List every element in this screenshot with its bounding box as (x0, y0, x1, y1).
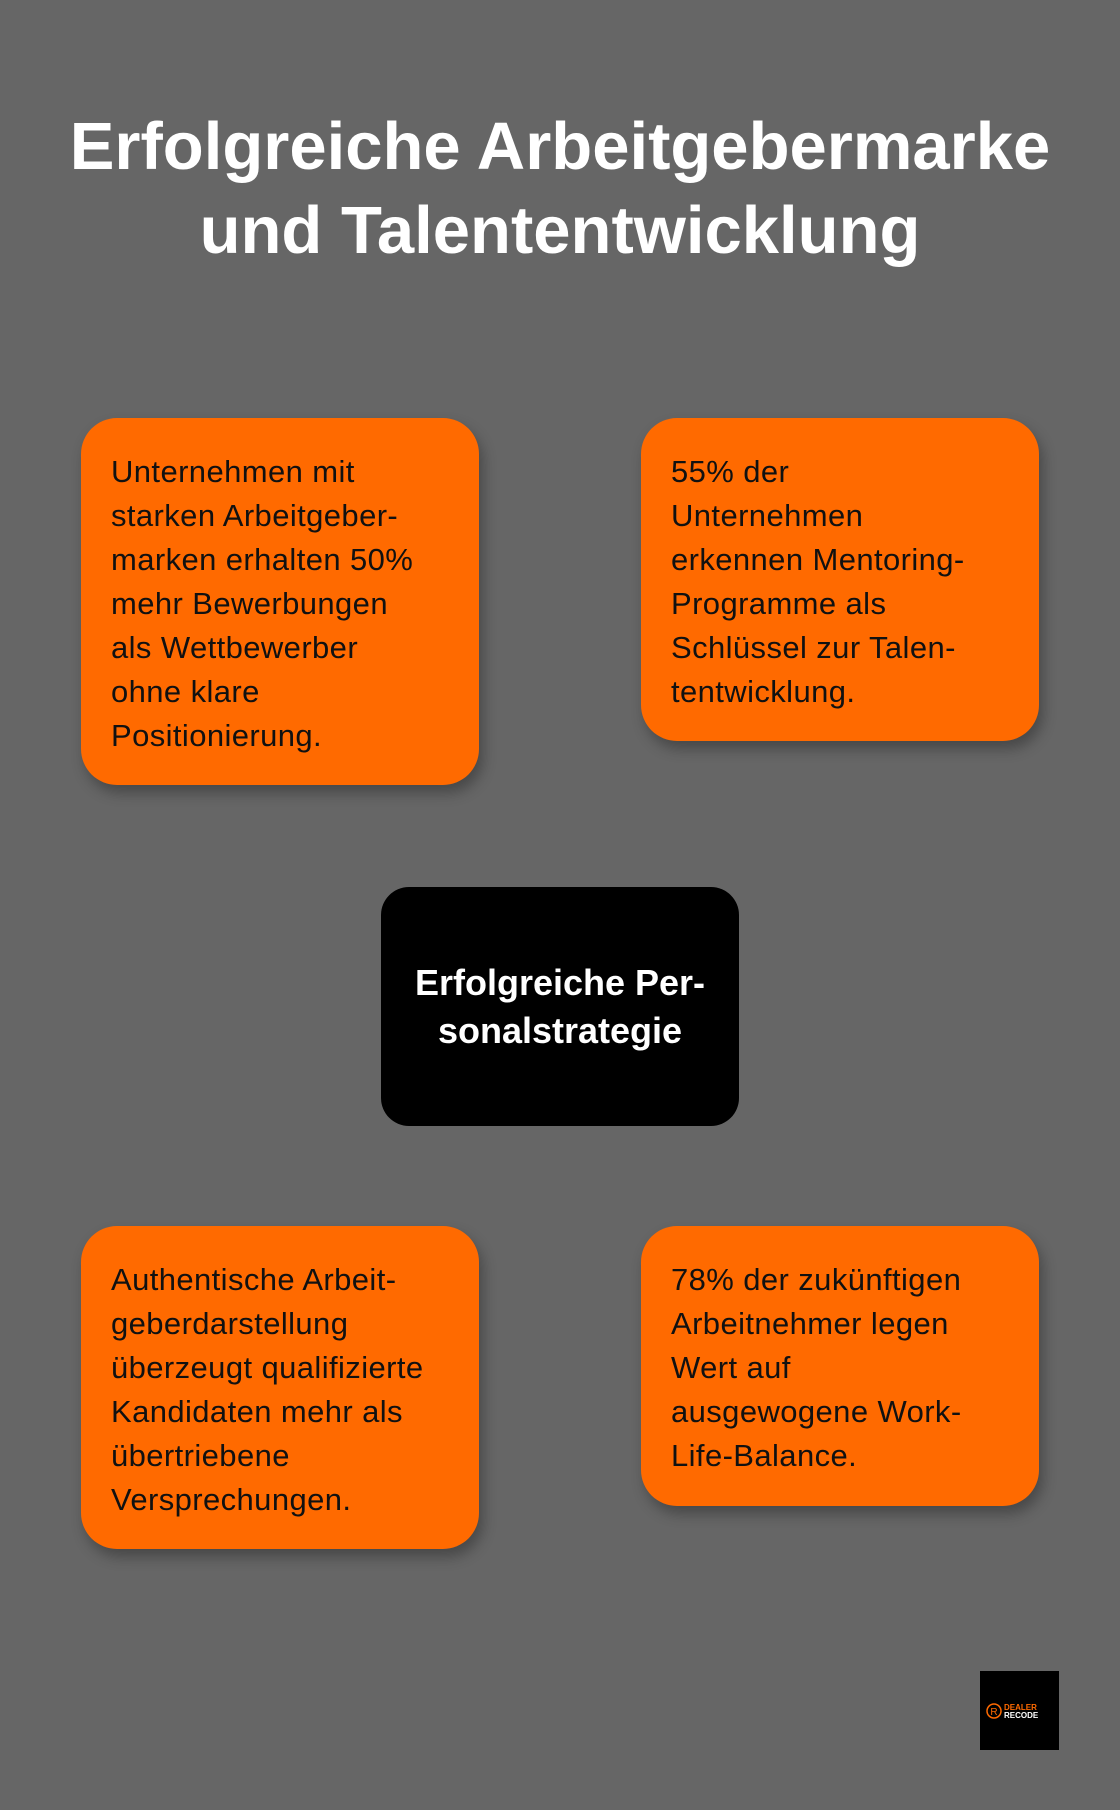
panel: bottom-left stat: Authentische Arbeit- (111, 1262, 396, 1297)
panel: top-left stat: Positionierung. (111, 718, 322, 753)
panel: bottom-right stat: Life-Balance. (671, 1438, 857, 1473)
title: Erfolgreiche Arbeitgebermarke (70, 109, 1050, 184)
panel: top-right stat: tentwicklung. (671, 674, 855, 709)
panel: bottom-right stat (641, 1226, 1039, 1506)
logo: DEALER (1004, 1702, 1037, 1712)
panel: bottom-left stat (81, 1226, 479, 1549)
panel: top-right stat: Schlüssel zur Talen- (671, 630, 956, 665)
panel: top-left stat: starken Arbeitgeber- (111, 498, 398, 533)
panel: bottom-right stat: 78% der zukünftigen (671, 1262, 961, 1297)
panel: top-right stat: 55% der (671, 454, 789, 489)
panel: top-right stat: erkennen Mentoring- (671, 542, 965, 577)
panel: top-left stat: marken erhalten 50% (111, 542, 413, 577)
panel: top-right stat: Programme als (671, 586, 886, 621)
panel: top-left stat: mehr Bewerbungen (111, 586, 388, 621)
logo: R (990, 1706, 997, 1718)
title (70, 109, 1050, 268)
panel: top-left stat: ohne klare (111, 674, 260, 709)
panel: center: Erfolgreiche Per- (415, 962, 705, 1002)
panel: bottom-left stat: Kandidaten mehr als (111, 1394, 403, 1429)
panel: bottom-left stat: Versprechungen. (111, 1482, 351, 1517)
panel: center (381, 887, 739, 1126)
panel: bottom-right stat: Wert auf (671, 1350, 791, 1385)
panel: top-right stat (641, 418, 1039, 741)
panel: top-left stat (81, 418, 479, 785)
panel: bottom-right stat: Arbeitnehmer legen (671, 1306, 949, 1341)
panel: bottom-left stat: überzeugt qualifizierte (111, 1350, 424, 1385)
panel: top-left stat: Unternehmen mit (111, 454, 355, 489)
panel: bottom-right stat: ausgewogene Work- (671, 1394, 962, 1429)
panel: top-left stat: als Wettbewerber (111, 630, 358, 665)
panel: bottom-left stat: übertriebene (111, 1438, 290, 1473)
panel: bottom-left stat: geberdarstellung (111, 1306, 348, 1341)
panel: top-right stat: Unternehmen (671, 498, 863, 533)
title: und Talententwicklung (200, 193, 920, 268)
logo: RECODE (1004, 1710, 1038, 1720)
panel: center: sonalstrategie (438, 1010, 682, 1050)
logo (980, 1671, 1059, 1750)
